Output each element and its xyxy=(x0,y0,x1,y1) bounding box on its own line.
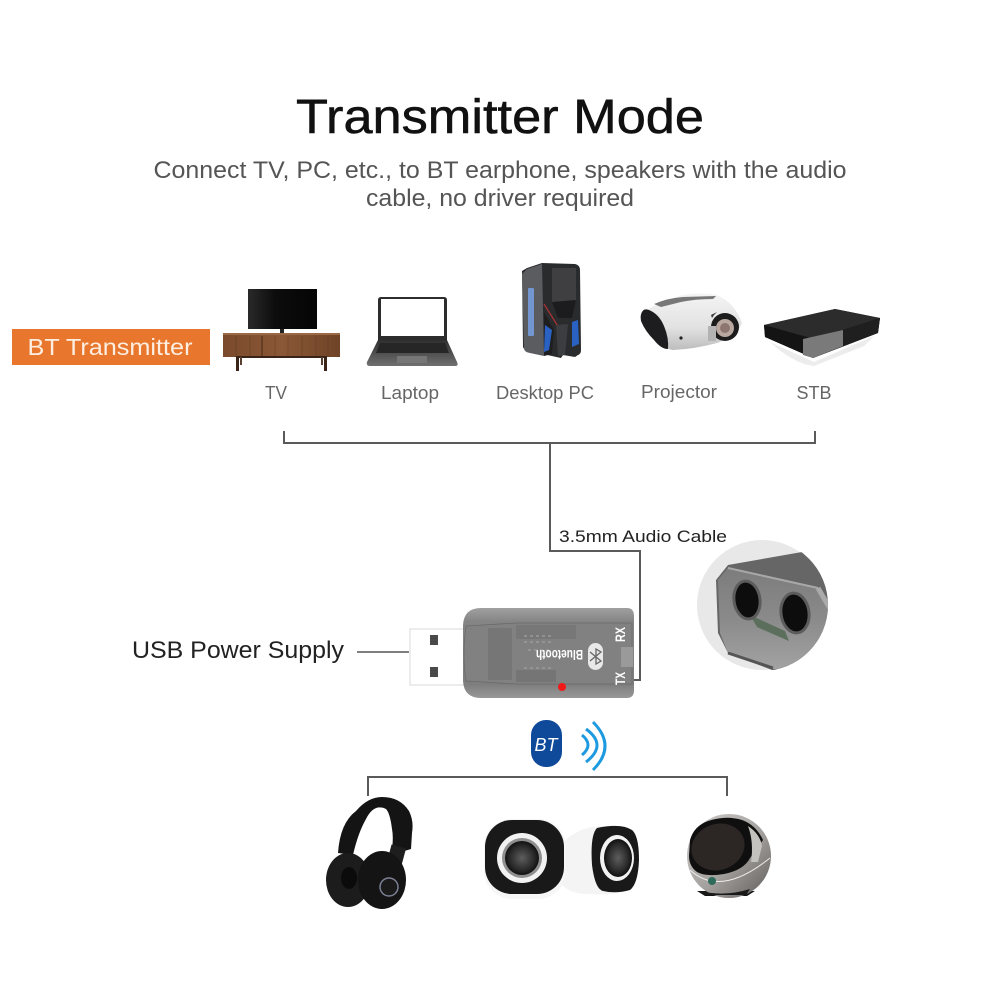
label: Desktop PC: Desktop PC xyxy=(496,383,594,403)
subtitle xyxy=(154,157,846,212)
right white speaker xyxy=(557,826,639,894)
badge: BT Transmitter: BT Transmitter xyxy=(28,334,193,360)
badge: BT Transmitter xyxy=(12,329,210,365)
device: round speaker xyxy=(685,814,771,898)
label: USB Power Supply: USB Power Supply xyxy=(132,637,344,664)
inset: audio jacks close-up xyxy=(697,540,842,670)
device: desktop PC tower xyxy=(522,263,581,358)
port strip xyxy=(621,647,633,667)
jack: left port xyxy=(731,579,763,621)
device: stereo speakers xyxy=(484,819,639,899)
device: laptop xyxy=(367,297,458,366)
title: Transmitter Mode xyxy=(296,91,704,144)
device: set-top box xyxy=(764,309,880,366)
dongle body xyxy=(463,608,634,698)
label: STB: STB xyxy=(796,383,832,403)
icon: Bluetooth oval xyxy=(588,643,603,670)
text: RX: RX xyxy=(612,626,628,642)
subtitle: cable, no driver required xyxy=(366,185,634,212)
label: TV: TV xyxy=(265,383,287,403)
text: TX: TX xyxy=(612,672,628,685)
Bluetooth USB dongle xyxy=(410,608,634,698)
label: Projector: Projector xyxy=(641,382,717,402)
icon: BT pill xyxy=(531,720,562,767)
label: Laptop: Laptop xyxy=(381,383,439,403)
icon: BT pill: BT xyxy=(534,735,559,755)
device: projector xyxy=(641,294,742,350)
LED xyxy=(558,683,566,691)
text: Bluetooth: Bluetooth xyxy=(536,647,583,663)
connector: device bracket and audio cable xyxy=(284,431,815,680)
device: headphones xyxy=(326,797,413,909)
device: TV on cabinet xyxy=(223,289,340,371)
icon: wireless waves xyxy=(582,722,605,770)
connector: speaker bracket xyxy=(368,777,727,796)
jack: right port xyxy=(778,591,812,635)
label: 3.5mm Audio Cable: 3.5mm Audio Cable xyxy=(559,527,727,546)
USB plug xyxy=(410,629,468,685)
connector: USB power line xyxy=(357,651,409,653)
subtitle: Connect TV, PC, etc., to BT earphone, speakers with the audio xyxy=(154,157,846,184)
left black speaker xyxy=(484,819,566,899)
